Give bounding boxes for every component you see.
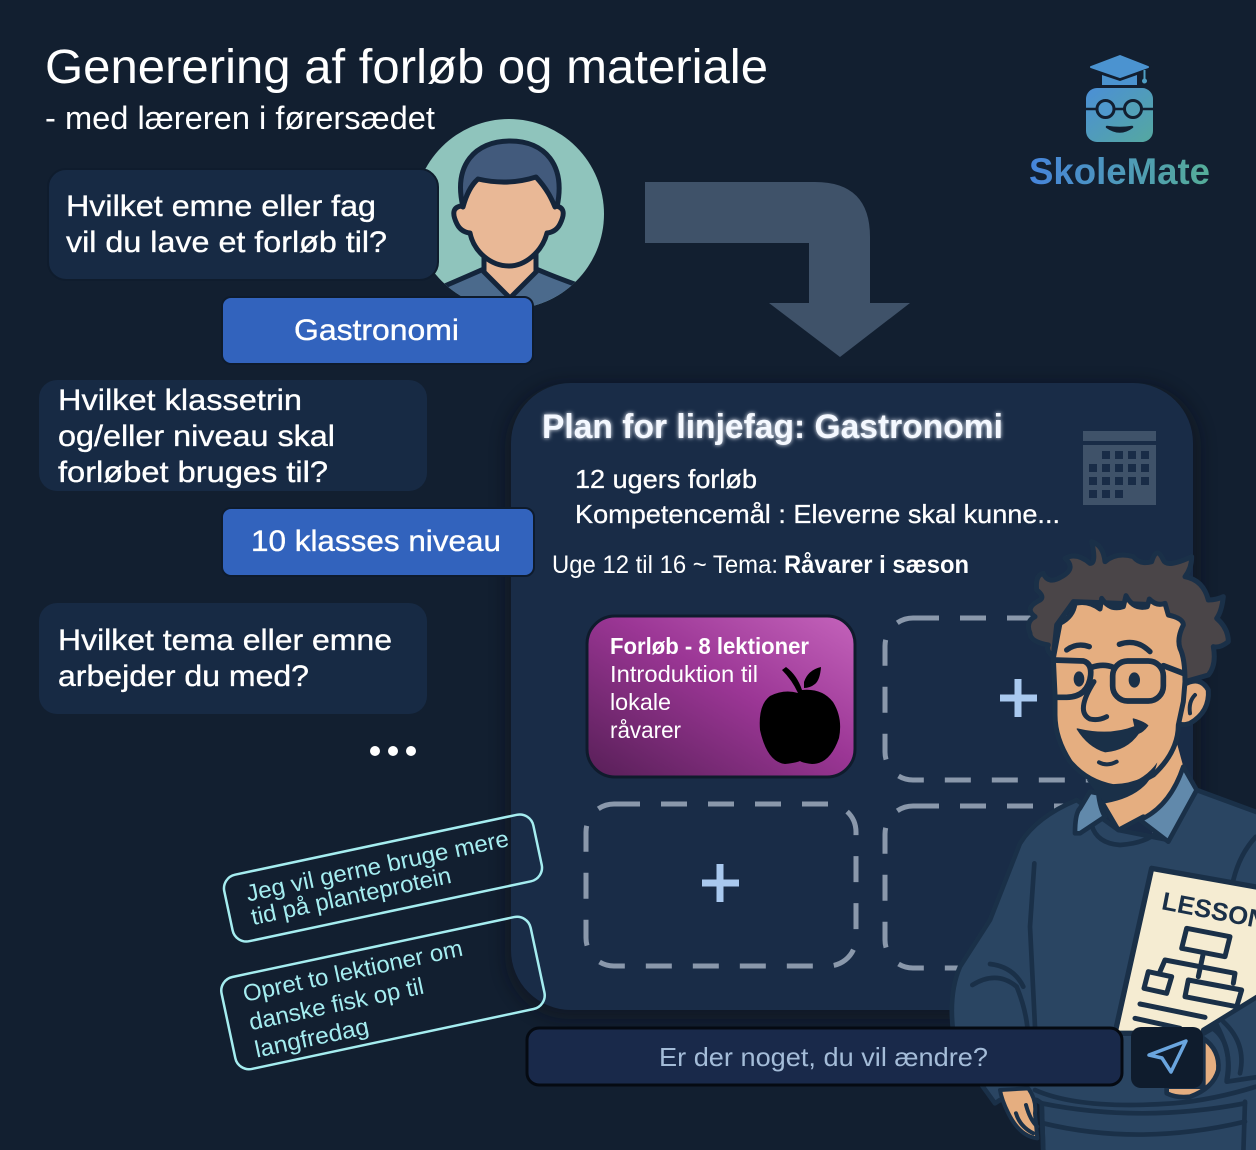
lesson card: Forløb - 8 lektioner (610, 633, 809, 659)
illustration: teacher (952, 542, 1256, 1150)
empty slot top right (885, 618, 1155, 780)
collar (1075, 767, 1197, 842)
speech bubble: klassetrin (39, 380, 427, 491)
answer button: 10 klasses niveau (222, 508, 534, 576)
answer button: Gastronomi (222, 297, 533, 364)
note: planteprotein: tid på planteprotein (249, 862, 454, 930)
duration text: 12 ugers forløb (575, 464, 757, 494)
theme text (552, 551, 969, 579)
finger lines (1016, 1105, 1037, 1133)
chat input: Er der noget, du vil ændre? (659, 1042, 988, 1072)
right hand (1167, 1038, 1218, 1097)
jaw shadow (1087, 762, 1157, 803)
speech bubble: emne: vil du lave et forløb til? (66, 226, 387, 259)
mouth (1077, 719, 1148, 752)
speech bubble: emne (48, 169, 438, 280)
teacher head (1028, 542, 1228, 803)
speech bubble: tema: arbejder du med? (58, 660, 309, 693)
lesson card (587, 616, 855, 777)
answer button: 10 klasses niveau: 10 klasses niveau (251, 525, 501, 558)
ear (1178, 681, 1208, 725)
neck (1097, 730, 1183, 830)
note: danske fisk (219, 914, 547, 1072)
sweater (952, 790, 1256, 1150)
note: danske fisk: Opret to lektioner om (240, 935, 465, 1007)
icon: calendar (1083, 431, 1156, 505)
note: danske fisk: langfredag (252, 1013, 371, 1063)
icon: apple (760, 667, 840, 764)
theme text: Uge 12 til 16 ~ Tema: (552, 551, 778, 579)
speech bubble: tema (39, 603, 427, 714)
lesson card: Introduktion til (610, 661, 758, 687)
note: danske fisk: danske fisk op til (246, 973, 426, 1035)
logo: SkoleMate: SkoleMate (1029, 151, 1210, 192)
title: Generering af forløb og materiale (45, 41, 768, 94)
plus top right (1000, 679, 1037, 717)
competence text: Kompetencemål : Eleverne skal kunne... (575, 499, 1060, 529)
icon: send arrow (1149, 1041, 1186, 1072)
answer button: Gastronomi: Gastronomi (294, 314, 459, 347)
note: planteprotein (221, 812, 545, 944)
note: planteprotein: Jeg vil gerne bruge mere (244, 825, 511, 906)
hair (1028, 542, 1228, 682)
plus bottom left (702, 864, 739, 902)
panel: plan (505, 383, 1201, 1019)
sleeve cuff (1210, 1022, 1241, 1080)
speech bubble: tema: Hvilket tema eller emne (58, 624, 392, 657)
subtitle: - med læreren i førersædet (45, 100, 435, 136)
speech bubble: klassetrin: og/eller niveau skal (58, 420, 335, 453)
panel heading: Plan for linjefag: Gastronomi (542, 408, 1003, 446)
lesson card: råvarer (610, 717, 681, 743)
empty slot bottom left (586, 804, 856, 966)
left hand (1000, 1088, 1037, 1138)
empty slot bottom right (885, 806, 1155, 968)
chat input (527, 1028, 1122, 1085)
send button (1131, 1027, 1203, 1088)
face (1053, 596, 1185, 787)
lesson card: lokale (610, 689, 671, 715)
theme text: Råvarer i sæson (784, 551, 969, 579)
eyes and brows (1067, 642, 1150, 720)
speech bubble: klassetrin: forløbet bruges til? (58, 456, 328, 489)
lesson sheet (1115, 868, 1256, 1033)
right sleeve (1203, 995, 1256, 1082)
icon: teacher avatar (426, 119, 604, 306)
sweater folds (972, 825, 1256, 1150)
logo: SkoleMate (1029, 56, 1210, 192)
speech bubble: emne: Hvilket emne eller fag (66, 190, 376, 223)
teacher body (952, 730, 1256, 1150)
speech bubble: klassetrin: Hvilket klassetrin (58, 384, 302, 417)
arrow (645, 182, 910, 357)
glasses (1053, 660, 1183, 701)
ellipsis dots (370, 746, 416, 756)
